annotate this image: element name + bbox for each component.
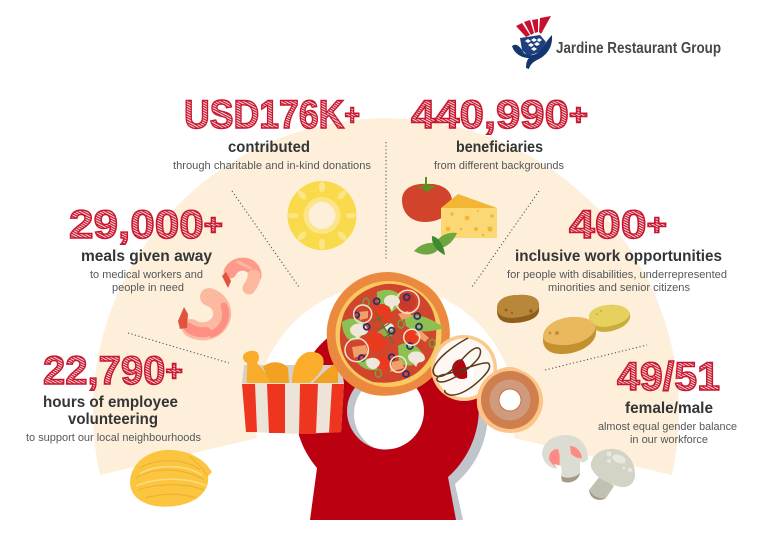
icon: shrimps [178, 262, 255, 334]
icon: potatoes [497, 295, 630, 354]
icon: pizza [327, 272, 450, 396]
box front [242, 383, 344, 434]
icon: tomato, cheese and basil [402, 177, 497, 255]
lettuce [342, 290, 444, 370]
stat: USD176K+ contributed [173, 93, 371, 172]
golden potato [543, 317, 596, 354]
description: for people with disabilities, underrepresented [507, 269, 727, 281]
green pepper rings [363, 298, 435, 377]
whole mushroom [589, 449, 635, 500]
description: almost equal gender balance [598, 421, 737, 433]
stat: 400+ inclusive work: minorities and senior citizens [548, 282, 690, 294]
heading: beneficiaries [456, 139, 543, 156]
stat: 22,790+ volunteering: volunteering [68, 411, 158, 428]
heading: inclusive work opportunities [515, 248, 722, 265]
stat: 22,790+ volunteering [26, 349, 201, 444]
heading: contributed [228, 139, 310, 156]
number: 49/51 [617, 355, 720, 399]
icon: mushrooms [542, 435, 635, 500]
heading: hours of employee [43, 394, 178, 411]
icon: noodles [130, 450, 212, 507]
onion rings [345, 290, 420, 372]
panel: cream arc background [93, 118, 679, 475]
icon: pineapple ring [288, 181, 356, 250]
stat: 29,000+ meals: people in need [112, 282, 184, 294]
description: to medical workers and [90, 269, 203, 281]
crust [327, 272, 450, 396]
cheese [441, 194, 497, 238]
icon: chicken bucket [242, 351, 349, 434]
box inside [242, 365, 344, 383]
description: to support our local neighbourhoods [26, 432, 201, 444]
stat: 400+ inclusive work [507, 203, 727, 294]
stat: 440,990+ beneficiaries [411, 93, 588, 172]
number: 22,790 [43, 349, 165, 393]
chicken pieces [243, 351, 349, 384]
top shrimp [222, 262, 255, 288]
icon: thistle [512, 16, 552, 69]
stat: 49/51 gender [598, 355, 737, 446]
heading: meals given away [81, 248, 212, 265]
description: through charitable and in-kind donations [173, 160, 371, 172]
stat: 29,000+ meals [69, 203, 223, 294]
number: + [204, 209, 223, 242]
keyhole in red [295, 316, 479, 520]
number: 440,990 [411, 93, 556, 137]
shrimp pieces [352, 311, 429, 372]
number: 29,000 [69, 203, 191, 247]
dotted dividers [128, 142, 647, 370]
basil [414, 233, 457, 255]
logo: Jardine Restaurant Group [512, 16, 721, 69]
number: + [647, 209, 667, 242]
olives [354, 294, 422, 377]
tomato [402, 177, 452, 222]
logo wordmark: Jardine Restaurant Group [556, 40, 721, 57]
icon: iced donut [431, 335, 497, 401]
number: + [569, 99, 588, 132]
number: USD176K [184, 93, 364, 137]
cut mushroom [542, 435, 588, 482]
brown potato [497, 295, 539, 323]
sauce [340, 284, 436, 383]
number: 400 [569, 203, 636, 247]
stat: 49/51 gender: in our workforce [630, 434, 708, 446]
rosemary [373, 312, 395, 344]
mushroom pieces [350, 295, 425, 369]
number: + [344, 99, 360, 132]
description: from different backgrounds [434, 160, 564, 172]
icon: chocolate donut [477, 367, 543, 433]
tomato slices [366, 293, 420, 370]
keyhole shadow [304, 322, 488, 520]
heading: female/male [625, 400, 713, 417]
box stripes [242, 384, 344, 434]
yellow potato [589, 305, 630, 332]
lower shrimp [178, 297, 226, 334]
number: + [165, 355, 183, 388]
